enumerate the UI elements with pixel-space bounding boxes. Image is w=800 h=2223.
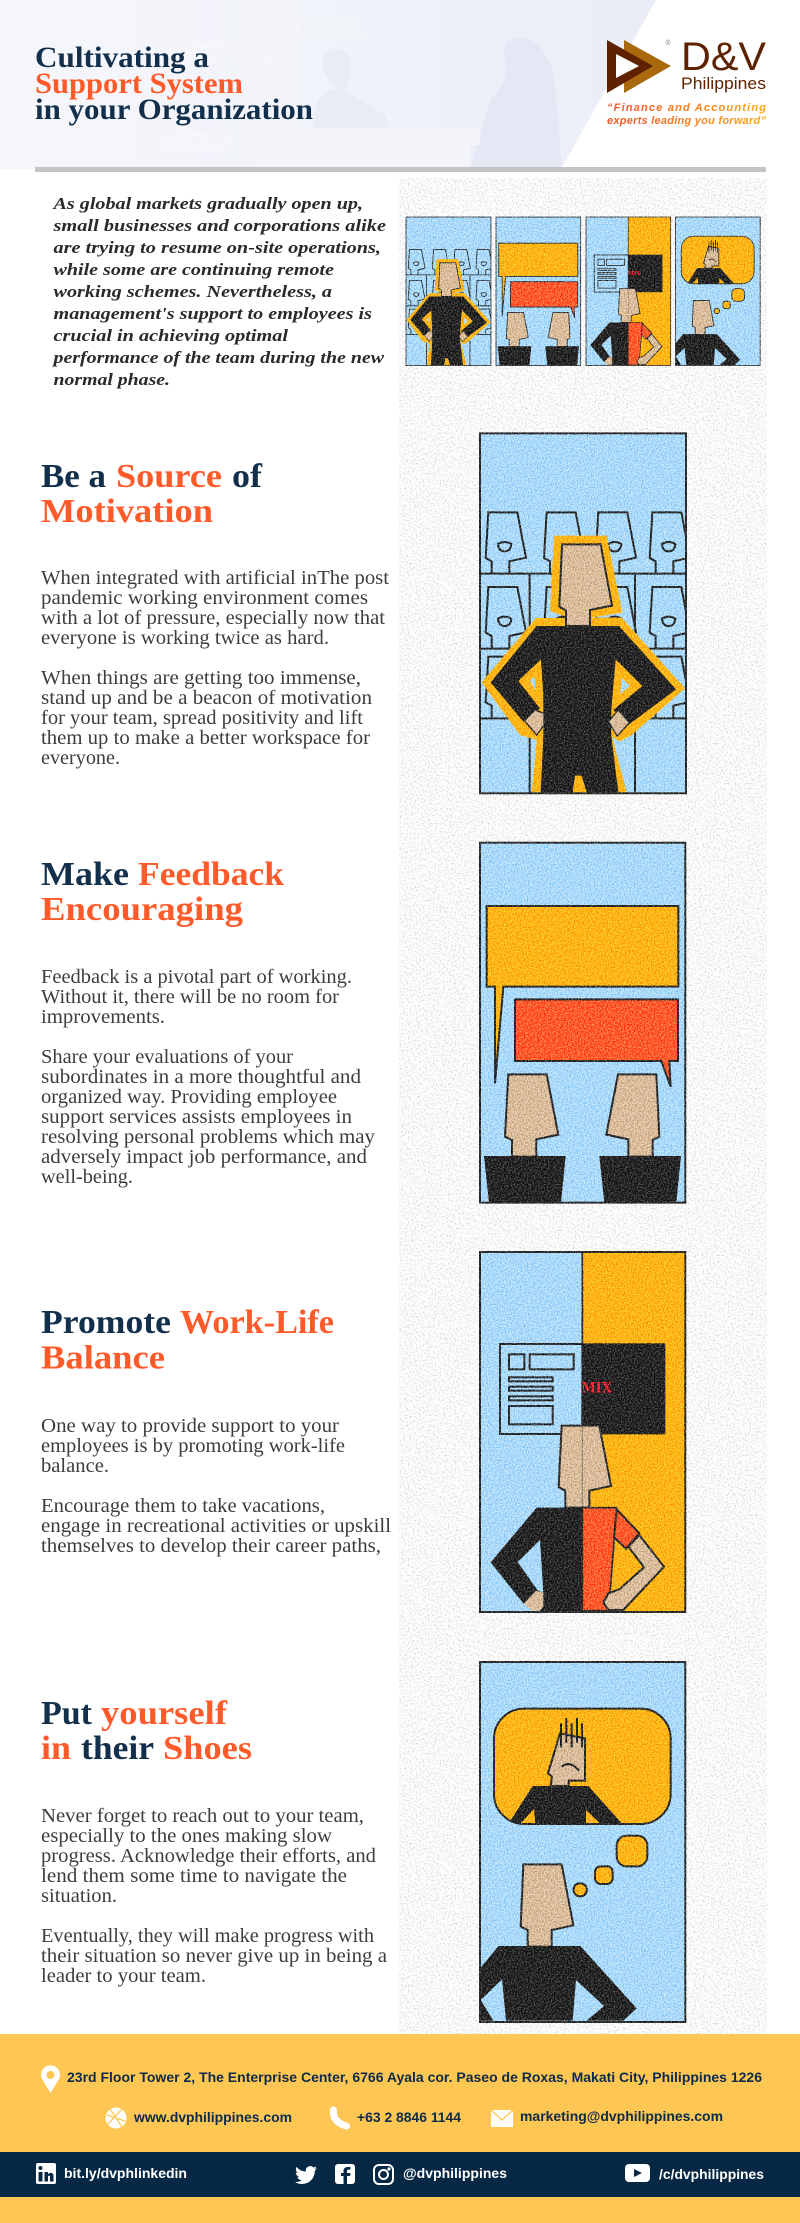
title (35, 41, 313, 126)
body text: When integrated with artificial inThe post (41, 567, 389, 589)
heading: Feedback (138, 856, 284, 893)
section: Put yourself in their Shoes (41, 1695, 387, 1987)
illustration: person imagining colleague (480, 1662, 685, 2022)
body text: adversely impact job performance, and (41, 1146, 367, 1168)
right head (606, 1074, 659, 1157)
heading (41, 856, 284, 928)
small thought bubbles (574, 1836, 647, 1896)
body text: Share your evaluations of your (41, 1046, 293, 1068)
intro text: normal phase. (54, 370, 170, 389)
body text: balance. (41, 1455, 109, 1477)
title: in your Organization (35, 93, 313, 126)
intro text: As global markets gradually open up, (52, 194, 363, 213)
footer: contact band (0, 2034, 800, 2223)
website: www.dvphilippines.com (133, 2110, 292, 2125)
youtube handle: /c/dvphilippines (659, 2167, 764, 2182)
heading: Be a (41, 458, 106, 495)
header banner background: Confidentiality (276, 26, 371, 43)
board, light half (500, 1344, 582, 1434)
illustration: two people with speech bubbles (480, 843, 685, 1203)
linkedin handle: bit.ly/dvphlinkedin (64, 2166, 187, 2181)
body text: themselves to develop their career paths, (41, 1535, 381, 1557)
body text: Never forget to reach out to your team, (41, 1805, 364, 1827)
intro text (51, 194, 387, 389)
head (559, 1426, 611, 1508)
body text: everyone. (41, 747, 120, 769)
body text: One way to provide support to your (41, 1415, 339, 1437)
body text: engage in recreational activities or upskill (41, 1515, 391, 1537)
heading: Make (41, 856, 129, 893)
orange half body (582, 1508, 617, 1611)
left head (505, 1074, 558, 1157)
body text (41, 966, 375, 1188)
logo: D&V Philippines (607, 35, 766, 127)
header banner background: keeping (180, 127, 233, 144)
intro text: performance of the team during the new (51, 348, 385, 367)
address: 23rd Floor Tower 2, The Enterprise Center, 6766 Ayala cor. Paseo de Roxas, Makati City, Philippines 1226 (67, 2070, 762, 2085)
body text: pandemic working environment comes (41, 587, 368, 609)
body text: support services assists employees in (41, 1106, 352, 1128)
heading: their (81, 1730, 154, 1767)
body text: for your team, spread positivity and lift (41, 707, 363, 729)
body text: progress. Acknowledge their efforts, and (41, 1845, 376, 1867)
body text: lend them some time to navigate the (41, 1865, 347, 1887)
logo: D&V Philippines: ® (665, 39, 671, 47)
heading (41, 1695, 252, 1767)
body text: employees is by promoting work-life (41, 1435, 345, 1457)
body text: organized way. Providing employee (41, 1086, 337, 1108)
icon: location pin (41, 2065, 60, 2093)
leader hands (608, 710, 629, 736)
body text: subordinates in a more thoughtful and (41, 1066, 361, 1088)
email: marketing@dvphilippines.com (520, 2109, 723, 2124)
body text (41, 1805, 387, 1987)
board, dark half with MIX label: MIX (581, 1381, 612, 1397)
body text: especially to the ones making slow (41, 1825, 333, 1847)
section: Be a Source of Motivation (41, 458, 389, 769)
body text: with a lot of pressure, especially now that (41, 607, 385, 629)
board, dark half with MIX label (581, 1343, 665, 1434)
icon: youtube (625, 2164, 650, 2182)
body text: their situation so never give up in being a (41, 1945, 387, 1967)
header banner background: Responsibility (182, 49, 275, 66)
heading: of (232, 458, 263, 495)
heading: Work-Life (180, 1304, 334, 1341)
intro text: while some are continuing remote (54, 260, 335, 279)
header banner background (0, 0, 656, 169)
heading: in (41, 1730, 71, 1767)
intro text: working schemes. Nevertheless, a (54, 282, 333, 301)
orange speech bubble (515, 999, 678, 1087)
section: Make Feedback Encouraging (41, 856, 375, 1188)
intro text: are trying to resume on-site operations, (54, 238, 381, 257)
icon: mail (491, 2110, 513, 2127)
leader head (559, 544, 612, 626)
body text (41, 1415, 391, 1557)
logo: D&V Philippines: experts leading you forward” (607, 115, 766, 127)
body text: them up to make a better workspace for (41, 727, 370, 749)
body text: Feedback is a pivotal part of working. (41, 966, 352, 988)
body text: improvements. (41, 1006, 165, 1028)
yellow outline of leader (482, 536, 685, 792)
yellow speech bubble (487, 906, 678, 1083)
dark half body (491, 1508, 582, 1612)
intro text: management's support to employees is (54, 304, 372, 323)
icon: globe (106, 2108, 126, 2128)
intro text: crucial in achieving optimal (54, 326, 288, 345)
header banner background: owning (190, 37, 238, 54)
heading: Shoes (163, 1730, 252, 1767)
body text (41, 567, 389, 769)
body text: stand up and be a beacon of motivation (41, 687, 372, 709)
speckled background panel (399, 178, 767, 2034)
heading: Source (116, 458, 222, 495)
leader body (491, 626, 676, 792)
icon: twitter (295, 2166, 317, 2184)
title: Support System (35, 67, 243, 100)
icon: phone (333, 2110, 346, 2126)
body text: leader to your team. (41, 1965, 206, 1987)
icon: logo arrows (607, 40, 671, 93)
heading: Motivation (41, 493, 213, 530)
body text: resolving personal problems which may (41, 1126, 375, 1148)
phone number: +63 2 8846 1144 (357, 2110, 462, 2125)
body text: Eventually, they will make progress with (41, 1925, 374, 1947)
body text: When things are getting too immense, (41, 667, 361, 689)
logo: D&V Philippines: “Finance and Accounting (607, 102, 766, 114)
thought bubble (494, 1709, 671, 1824)
intro text: small businesses and corporations alike (52, 216, 387, 235)
thinker body (480, 1946, 637, 2021)
title: Cultivating a (35, 41, 209, 74)
thinker head (521, 1864, 573, 1947)
heading: Promote (41, 1304, 171, 1341)
body text: Without it, there will be no room for (41, 986, 339, 1008)
heading (41, 1304, 334, 1376)
section: Promote Work-Life Balance (41, 1304, 391, 1557)
social handle: @dvphilippines (403, 2166, 507, 2181)
icon: facebook (335, 2164, 355, 2184)
illustration: half work half life figure (480, 1252, 685, 1612)
footer: social band (0, 2152, 800, 2197)
logo: D&V Philippines: Philippines (681, 75, 766, 93)
heading: Balance (41, 1340, 165, 1376)
comic strip: four mini panels (406, 217, 760, 366)
shirts (484, 1156, 681, 1203)
icon: linkedin (36, 2163, 56, 2184)
illustration: leader among crowd (480, 433, 690, 793)
header banner background: Objectivity (160, 139, 230, 156)
body text: situation. (41, 1885, 117, 1907)
body text: everyone is working twice as hard. (41, 627, 329, 649)
heading (41, 458, 263, 530)
logo: D&V Philippines: D&V (681, 35, 766, 79)
body text: Encourage them to take vacations, (41, 1495, 325, 1517)
heading: Put (41, 1695, 93, 1732)
heading: Encouraging (41, 891, 243, 928)
heading: yourself (101, 1695, 228, 1732)
body text: well-being. (41, 1166, 133, 1188)
header banner background: practicing (295, 14, 359, 31)
divider bar (35, 167, 766, 172)
icon: instagram (374, 2165, 393, 2184)
